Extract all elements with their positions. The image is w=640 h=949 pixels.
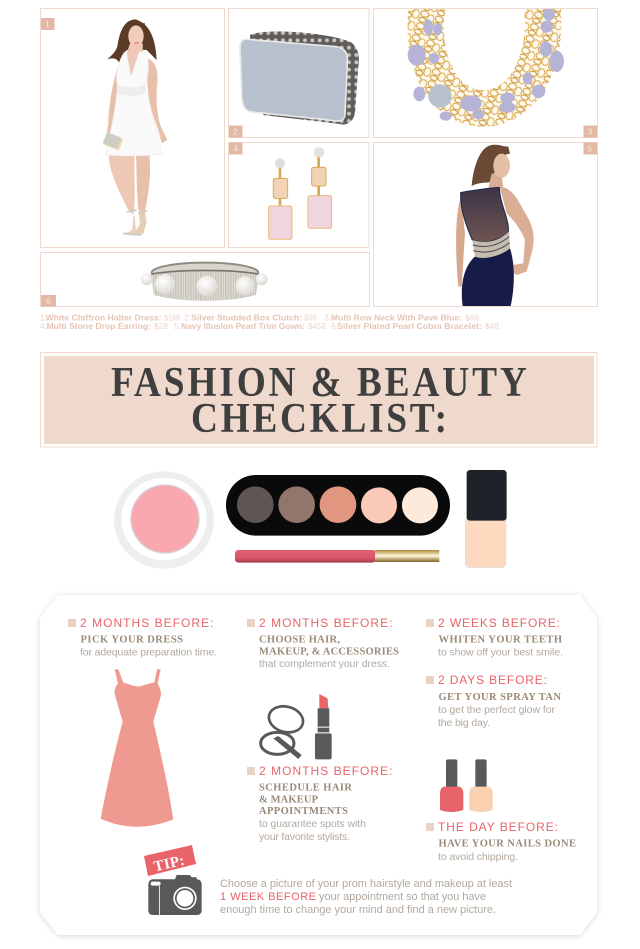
title bbox=[111, 358, 527, 442]
panel: product 5 gown bbox=[374, 142, 598, 306]
label 1 bbox=[41, 18, 54, 30]
photo: pearl bracelet bbox=[141, 263, 268, 301]
step: choose hair makeup accessories bbox=[247, 616, 399, 670]
label 5 bbox=[584, 142, 597, 154]
step: nails done bbox=[426, 820, 576, 863]
tip text: enough time to change your mind and find a new picture. bbox=[220, 904, 496, 916]
step: choose hair makeup accessories: that complement your dress. bbox=[259, 658, 390, 670]
tip text bbox=[220, 878, 512, 916]
icon: camera bbox=[148, 875, 202, 915]
label 3: 3 bbox=[588, 128, 593, 136]
step: whiten teeth: to show off your best smile. bbox=[438, 646, 563, 658]
step: spray tan: the big day. bbox=[438, 717, 490, 729]
step: nails done: to avoid chipping. bbox=[438, 851, 518, 863]
icon: nail polish bottle bbox=[466, 470, 507, 567]
panel: product 1 dress bbox=[40, 8, 224, 248]
tag: tip: TIP: bbox=[152, 853, 186, 875]
label 4: 4 bbox=[233, 144, 238, 154]
step: whiten teeth bbox=[426, 616, 563, 658]
label 2: 2 bbox=[233, 128, 238, 136]
cosmetics illustration bbox=[114, 470, 507, 569]
step: pick your dress: PICK YOUR DRESS bbox=[80, 634, 183, 646]
step: spray tan: to get the perfect glow for bbox=[438, 704, 556, 716]
product price captions: 3. bbox=[324, 312, 331, 322]
photo: drop earrings bbox=[269, 147, 332, 239]
icon: eyeshadow palette bbox=[226, 475, 450, 536]
product price captions: $98 bbox=[304, 312, 317, 322]
title banner bbox=[40, 352, 597, 447]
step: pick your dress: for adequate preparation time. bbox=[80, 646, 217, 658]
step: spray tan: 2 DAYS BEFORE: bbox=[438, 673, 547, 687]
icon: nail polish bottles bbox=[440, 759, 493, 812]
step: pick your dress: 2 MONTHS BEFORE: bbox=[80, 616, 214, 630]
product price captions: $28 bbox=[154, 321, 168, 331]
step: nails done: THE DAY BEFORE: bbox=[438, 820, 558, 834]
product price captions: Multi Row Neck With Pave Blue: bbox=[331, 312, 462, 322]
label 6 bbox=[41, 295, 56, 306]
photo: gold necklace bbox=[408, 0, 564, 121]
step: nails done: HAVE YOUR NAILS DONE bbox=[438, 838, 576, 850]
panel: product 2 clutch bbox=[228, 8, 369, 138]
icon: dress bbox=[101, 669, 173, 827]
product price captions: Multi Stone Drop Earring: bbox=[46, 321, 151, 331]
product price captions: Silver Plated Pearl Cobra Bracelet: bbox=[337, 321, 482, 331]
step: choose hair makeup accessories: 2 MONTHS BEFORE: bbox=[259, 616, 392, 630]
tip text: your appointment so that you have bbox=[319, 891, 486, 903]
label 1: 1 bbox=[45, 20, 50, 29]
step: schedule hair and makeup: APPOINTMENTS bbox=[259, 806, 348, 817]
label 3 bbox=[584, 126, 597, 138]
step: whiten teeth: 2 WEEKS BEFORE: bbox=[438, 616, 560, 630]
product price captions: 1. bbox=[40, 312, 47, 322]
step: schedule hair and makeup: 2 MONTHS BEFORE: bbox=[259, 764, 392, 778]
icon: lip pencil bbox=[235, 550, 439, 563]
panel: product 3 necklace bbox=[374, 0, 598, 138]
step: schedule hair and makeup: your favorite stylists. bbox=[259, 831, 350, 843]
label 2 bbox=[229, 126, 242, 138]
panel: product 6 bracelet bbox=[40, 252, 370, 306]
product price captions: White Chiffron Halter Dress: bbox=[46, 312, 162, 322]
step: schedule hair and makeup: SCHEDULE HAIR bbox=[259, 782, 352, 794]
tip text: Choose a picture of your prom hairstyle and makeup at least bbox=[220, 878, 512, 890]
title: CHECKLIST: bbox=[191, 394, 447, 442]
step: whiten teeth: WHITEN YOUR TEETH bbox=[438, 634, 562, 646]
photo: navy gown bbox=[456, 145, 534, 306]
panel: product 4 earrings bbox=[228, 142, 369, 248]
step: schedule hair and makeup: & MAKEUP bbox=[259, 794, 319, 806]
product price captions: $68 bbox=[465, 312, 479, 322]
step: schedule hair and makeup bbox=[247, 764, 392, 843]
photo: silver clutch bbox=[240, 32, 359, 124]
tip text: 1 WEEK BEFORE bbox=[220, 891, 316, 903]
product price captions: 6. bbox=[331, 321, 338, 331]
product price captions: $458 bbox=[308, 321, 326, 331]
product price captions: Navy Illusion Pearl Trim Gown: bbox=[181, 321, 305, 331]
panel: timeline checklist bbox=[40, 595, 597, 935]
product price captions: 5. bbox=[174, 321, 181, 331]
step: schedule hair and makeup: to guarantee spots with bbox=[259, 818, 366, 830]
tag: tip bbox=[144, 845, 196, 876]
product price captions: $48 bbox=[485, 321, 499, 331]
product price captions: $188 bbox=[164, 312, 180, 322]
product price captions: 4. bbox=[40, 321, 47, 331]
product price captions bbox=[40, 312, 499, 331]
label 4 bbox=[229, 142, 242, 154]
step: spray tan: GET YOUR SPRAY TAN bbox=[438, 692, 561, 703]
label 6: 6 bbox=[46, 297, 51, 306]
step: choose hair makeup accessories: CHOOSE HAIR, bbox=[259, 634, 340, 646]
product price captions: Silver Studded Box Clutch: bbox=[191, 312, 302, 322]
icon: blush compact bbox=[114, 471, 214, 569]
photo: woman in white dress bbox=[102, 19, 167, 236]
title: FASHION & BEAUTY bbox=[111, 358, 527, 406]
icon: compact mirror and lipstick bbox=[261, 694, 332, 759]
step: choose hair makeup accessories: MAKEUP, & ACCESSORIES bbox=[259, 646, 399, 658]
label 5: 5 bbox=[588, 144, 593, 154]
step: spray tan bbox=[426, 673, 561, 729]
step: pick your dress bbox=[68, 616, 217, 658]
product price captions: 2. bbox=[184, 312, 191, 322]
